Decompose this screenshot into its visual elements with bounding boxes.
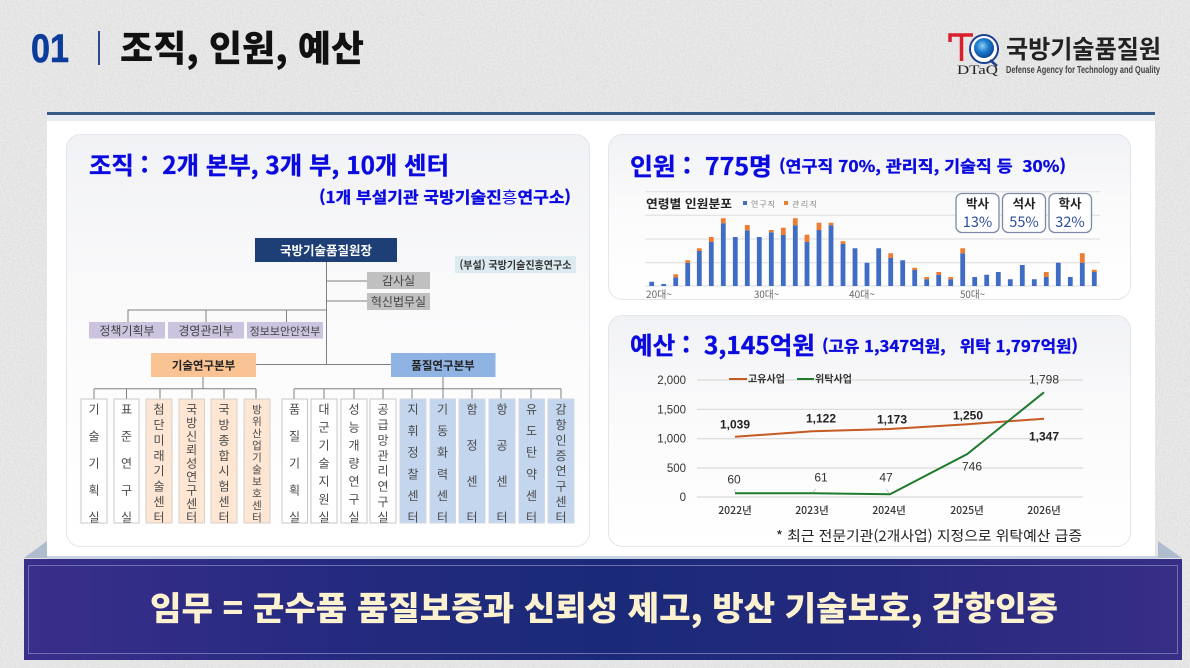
entrusted business values (727, 372, 1059, 486)
section number: 01 (31, 27, 69, 71)
box: quality research HQ (391, 353, 496, 377)
logo name: 국방기술품질원 (1006, 30, 1161, 66)
logo: DTaQ 국방기술품질원 (950, 30, 1161, 77)
box: audit office (367, 272, 430, 289)
entrusted business values: 61 (814, 470, 828, 484)
units: technology research: 국방신뢰성연구센터 (186, 400, 197, 526)
own business values: 1,039 (720, 418, 750, 432)
badge: doctorate: 박사 (966, 193, 989, 212)
badge: bachelor (1049, 193, 1092, 232)
units: quality research: 감항인증연구센터 (555, 400, 567, 526)
entrusted business values: 1,798 (1029, 372, 1059, 386)
line chart: budget by year (657, 370, 1083, 518)
own business values: 1,250 (953, 408, 983, 422)
panel: organization (66, 134, 590, 546)
y axis labels: 1,000 (657, 434, 686, 446)
own business values (720, 408, 1059, 444)
box: management: 경영관리부 (178, 322, 234, 339)
units: quality research: 대군기술지원실 (318, 400, 330, 526)
box: innovation legal office: 혁신법무실 (371, 293, 426, 310)
axis labels: 30대~ (754, 286, 779, 301)
units: quality research: 성능개량연구실 (348, 400, 360, 526)
own business values: 1,122 (806, 412, 836, 426)
box: president: 국방기술품질원장 (280, 240, 372, 259)
box: technology research HQ: 기술연구본부 (172, 358, 236, 374)
banner: mission (24, 559, 1182, 660)
main white sheet (47, 118, 1155, 558)
own business values: 1,347 (1029, 430, 1059, 444)
badge: doctorate: 13% (963, 211, 992, 232)
box: attached institute: (부설) 국방기술진흥연구소 (460, 258, 572, 272)
y axis labels: 2,000 (657, 375, 686, 387)
bar chart: age distribution (645, 192, 1100, 301)
logo acronym: DTaQ (957, 62, 999, 77)
entrusted business values: 746 (962, 460, 982, 474)
own business values: 1,173 (877, 412, 907, 426)
heading: personnel: 인원 : 775명 (630, 147, 772, 182)
heading: budget: 예산 : 3,145억원 (630, 326, 815, 361)
line: entrusted business (735, 392, 1044, 494)
units: quality research: 품질기획실 (289, 400, 300, 526)
units: technology research: 국방종합시험센터 (218, 400, 230, 526)
chart legend: 위탁사업 (815, 370, 852, 386)
box: policy planning: 정책기획부 (99, 322, 155, 339)
chart legend: 관리직 (792, 199, 817, 210)
chart title: 연령별 인원분포 (646, 195, 732, 212)
panel: budget (608, 316, 1130, 546)
page title: 조직, 인원, 예산 (120, 20, 364, 72)
banner text: 임무 = 군수품 품질보증과 신뢰성 제고, 방산 기술보호, 감항인증 (150, 582, 1058, 630)
box: information security: 정보보안안전부 (250, 323, 320, 339)
units: technology research (81, 399, 270, 526)
badge: bachelor: 학사 (1058, 193, 1082, 212)
icon: DTaQ emblem (950, 35, 998, 66)
chart legend (743, 199, 817, 210)
y axis labels: 500 (667, 463, 686, 475)
bars: researchers (652, 223, 1094, 286)
axis labels: 40대~ (849, 286, 875, 301)
box: quality research HQ: 품질연구본부 (411, 358, 475, 374)
banner side folds (24, 541, 47, 558)
entrusted business values: 60 (727, 472, 741, 486)
x axis labels: 2022년 (718, 503, 752, 518)
units: quality research: 지휘정찰센터 (407, 400, 419, 526)
units: quality research: 항공센터 (496, 400, 508, 526)
badge: doctorate (956, 193, 999, 232)
units: technology research: 첨단미래기술센터 (153, 400, 165, 526)
badge: master (1002, 193, 1046, 232)
sub heading: personnel composition: (연구직 70%, 관리직, 기술직 등 30%) (779, 153, 1066, 177)
panel: personnel (608, 134, 1130, 301)
x axis labels: 2026년 (1027, 503, 1061, 518)
axis labels (646, 286, 985, 301)
badge: master: 55% (1009, 211, 1039, 232)
budget footnote: * 최근 전문기관(2개사업) 지정으로 위탁예산 급증 (776, 526, 1082, 546)
x axis labels: 2023년 (795, 503, 829, 518)
entrusted business values: 47 (879, 470, 893, 484)
y axis labels: 1,500 (657, 404, 686, 416)
chart legend (729, 370, 852, 386)
units: quality research: 기동화력센터 (437, 400, 448, 526)
sub heading: attached institute: (1개 부설기관 국방기술진 흥연구소) (319, 184, 571, 208)
badge: bachelor: 32% (1055, 211, 1085, 232)
line: own business (735, 419, 1044, 437)
units: quality research: 유도탄약센터 (526, 400, 537, 526)
box: president (255, 238, 397, 262)
box: technology research HQ (151, 353, 256, 377)
box: audit office: 감사실 (382, 272, 415, 289)
sub heading: budget composition: (고유 1,347억원, 위탁 1,797억원) (822, 333, 1078, 357)
units: quality research (282, 399, 574, 526)
heading: organization: 조직 : 2개 본부, 3개 부, 10개 센터 (89, 146, 449, 181)
units: quality research: 공급망관리연구실 (377, 400, 389, 526)
y axis labels (657, 375, 686, 504)
chart legend: 고유사업 (748, 370, 785, 386)
x axis labels: 2024년 (872, 503, 906, 518)
x axis labels: 2025년 (950, 503, 984, 518)
chart legend: 연구직 (751, 199, 775, 210)
units: quality research: 함정센터 (466, 400, 478, 526)
axis labels: 20대~ (646, 286, 672, 301)
units: technology research: 방위산업기술보호센터 (252, 402, 262, 525)
units: technology research: 표준연구실 (121, 400, 132, 526)
badge: master: 석사 (1012, 193, 1036, 212)
y axis labels: 0 (680, 492, 686, 504)
units: technology research: 기술기획실 (88, 400, 100, 526)
org chart (81, 238, 576, 526)
x axis labels (718, 503, 1061, 518)
bars: administrative staff (676, 218, 1094, 279)
axis labels: 50대~ (960, 286, 985, 301)
